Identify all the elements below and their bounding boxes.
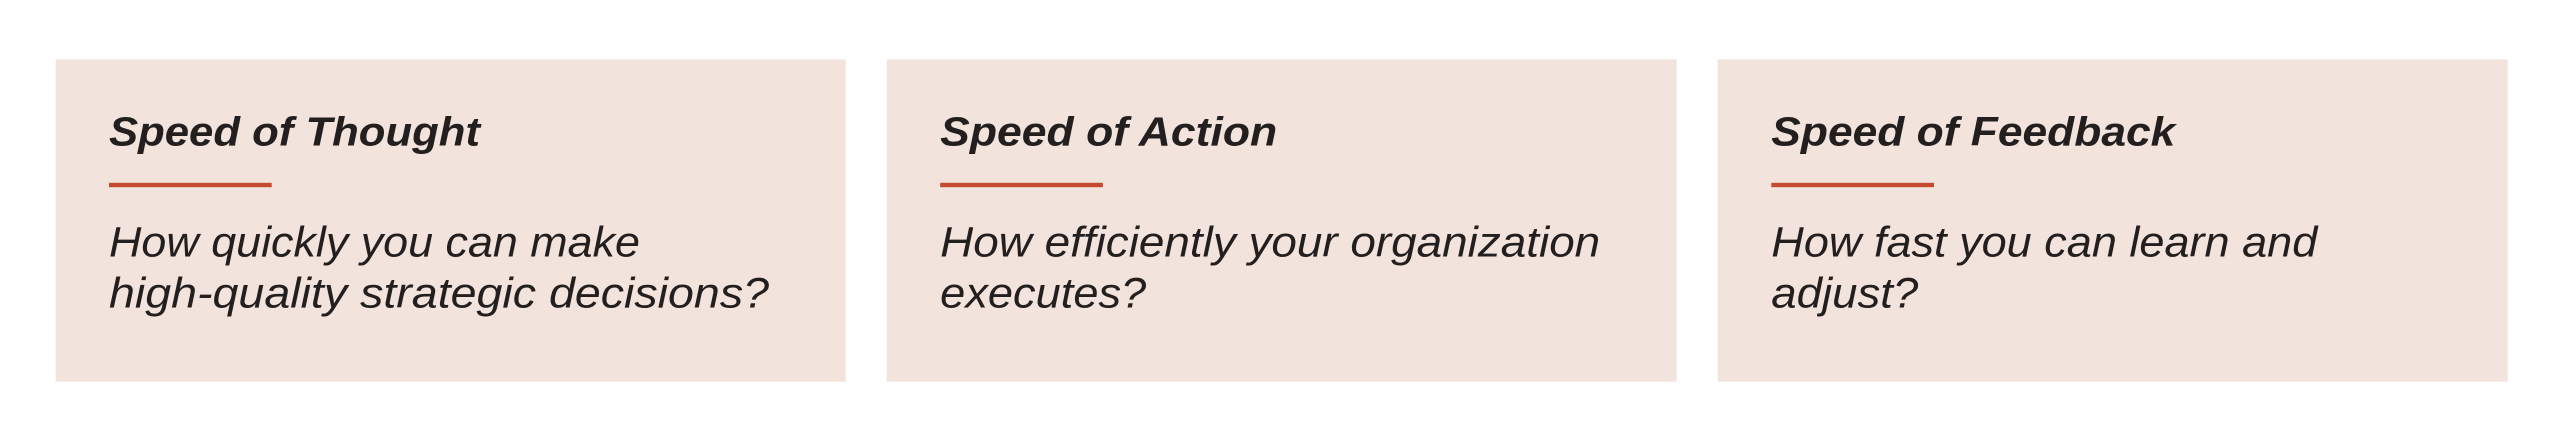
- body text: speed of thought: How quickly you can make: [109, 218, 640, 266]
- panel: speed of action: [887, 59, 1677, 382]
- accent rule: [940, 183, 1103, 187]
- body text: speed of thought: [109, 218, 769, 318]
- body text: speed of feedback: [1771, 218, 2319, 318]
- body text: speed of feedback: adjust?: [1771, 270, 1918, 318]
- body text: speed of action: executes?: [940, 270, 1146, 318]
- body text: speed of feedback: How fast you can learn and: [1771, 218, 2319, 266]
- body text: speed of action: How efficiently your organization: [940, 218, 1600, 266]
- heading: speed of feedback: Speed of Feedback: [1771, 108, 2178, 154]
- panel: speed of thought: [56, 59, 846, 382]
- accent rule: [109, 183, 272, 187]
- body text: speed of thought: high-quality strategic decisions?: [109, 270, 769, 318]
- panel: speed of feedback: [1718, 59, 2508, 382]
- accent rule: [1771, 183, 1934, 187]
- heading: speed of thought: Speed of Thought: [109, 108, 482, 154]
- heading: speed of action: Speed of Action: [940, 108, 1277, 154]
- body text: speed of action: [940, 218, 1600, 318]
